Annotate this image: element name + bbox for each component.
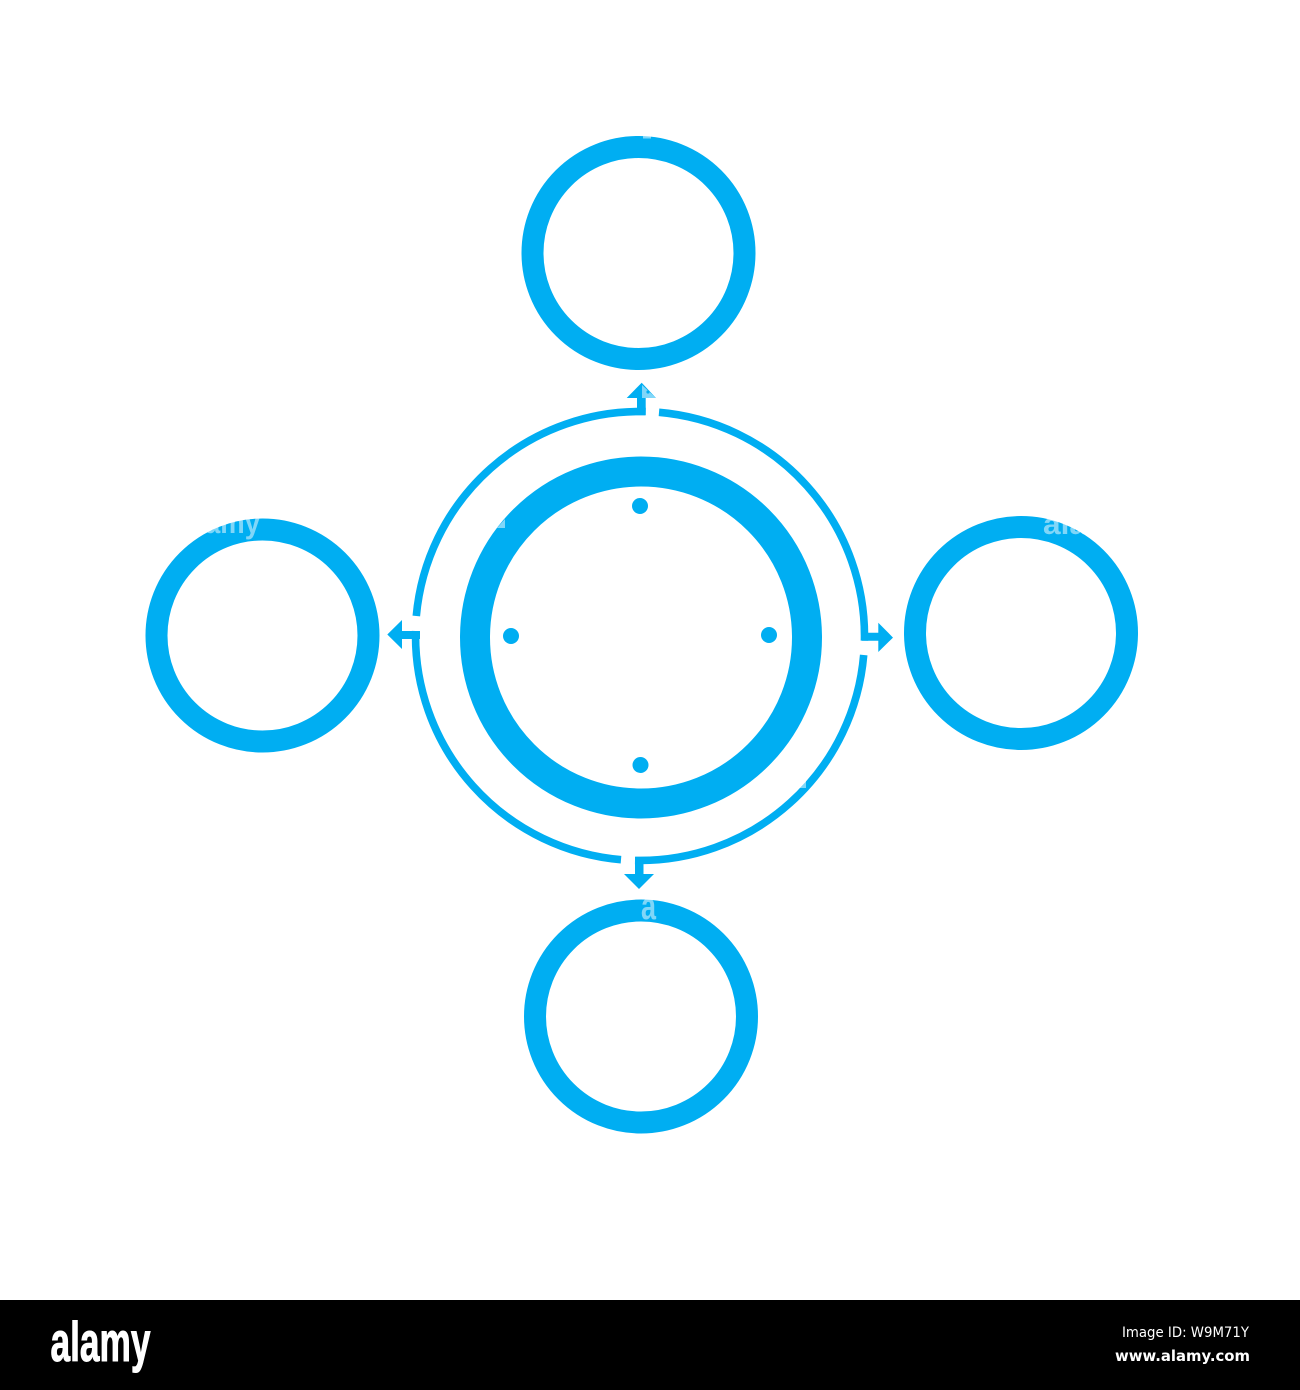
image id text: Image ID: W9M71Y	[1122, 1325, 1249, 1341]
circle: bottom satellite	[535, 886, 747, 1122]
central hub ring with four dots	[475, 472, 807, 804]
circle: left satellite	[156, 505, 368, 742]
circle: bottom satellite: a	[641, 886, 657, 928]
arc and arrow: to left circle	[387, 620, 621, 860]
website text: www.alamy.com	[1115, 1347, 1250, 1365]
arc and arrow: to bottom circle	[624, 655, 864, 889]
logo text: alamy	[50, 1310, 150, 1373]
diagram: hub with four satellite circles	[156, 136, 1127, 1122]
circle: right satellite: ala	[1043, 508, 1087, 541]
arc and arrow: to top circle	[416, 383, 656, 616]
circle: top satellite	[532, 136, 744, 359]
circle: left satellite: amy	[205, 505, 261, 540]
footer bar	[0, 1300, 1300, 1390]
arrow ring: four arcs with outward arrows	[387, 383, 893, 889]
circle: right satellite	[915, 508, 1127, 739]
arc and arrow: to right circle	[659, 412, 893, 652]
